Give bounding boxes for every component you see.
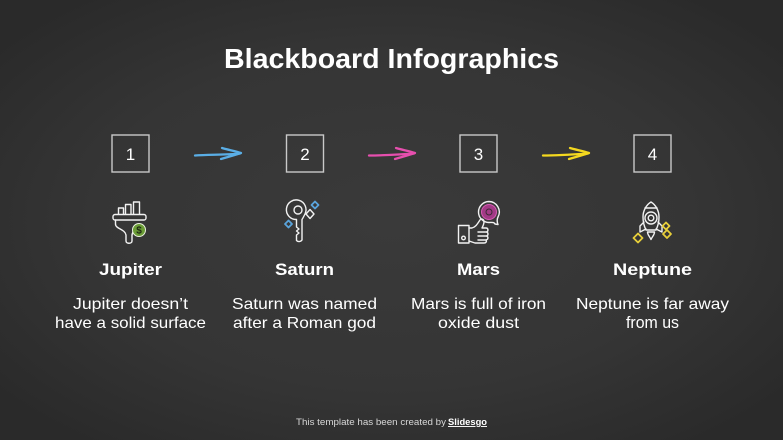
text: Mars description <box>411 296 546 332</box>
text: Neptune description <box>576 296 729 332</box>
text: Jupiter description <box>55 296 206 332</box>
icon: funnel with dollar coin <box>113 202 146 243</box>
text: Saturn description: Saturn was named <box>232 296 377 313</box>
text: Jupiter description: Jupiter doesn’t <box>73 296 189 313</box>
heading: Mars: Mars <box>457 260 500 279</box>
icon: thumbs up with smiley bubble <box>458 202 499 243</box>
icon: funnel with dollar coin: $ <box>136 226 142 236</box>
number box 1: 1 <box>126 145 135 164</box>
arrow: yellow <box>543 148 589 159</box>
number box 1 <box>112 135 149 172</box>
number box 3: 3 <box>474 145 483 164</box>
icon: key with sparkles <box>285 200 318 242</box>
arrow: pink <box>369 148 415 159</box>
heading: Saturn: Saturn <box>275 260 334 279</box>
text: Saturn description <box>232 296 377 332</box>
text: Mars description: oxide dust <box>438 315 520 332</box>
number box 3 <box>460 135 497 172</box>
number box 2: 2 <box>300 145 310 164</box>
footer credit: This template has been created by <box>296 417 446 428</box>
footer credit: Slidesgo <box>448 417 487 428</box>
text: Saturn description: after a Roman god <box>233 315 376 332</box>
number box 4 <box>634 135 671 172</box>
text: Neptune description: from us <box>626 314 679 332</box>
title: Blackboard Infographics <box>224 43 559 74</box>
text: Jupiter description: have a solid surface <box>55 315 206 332</box>
icon: rocket with sparkles <box>634 202 671 242</box>
heading: Neptune: Neptune <box>613 260 692 279</box>
number box 2 <box>286 135 324 172</box>
number box 4: 4 <box>648 145 657 164</box>
text: Mars description: Mars is full of iron <box>411 296 546 313</box>
arrow: blue <box>195 148 241 159</box>
heading: Jupiter: Jupiter <box>99 260 162 279</box>
text: Neptune description: Neptune is far away <box>576 296 729 313</box>
